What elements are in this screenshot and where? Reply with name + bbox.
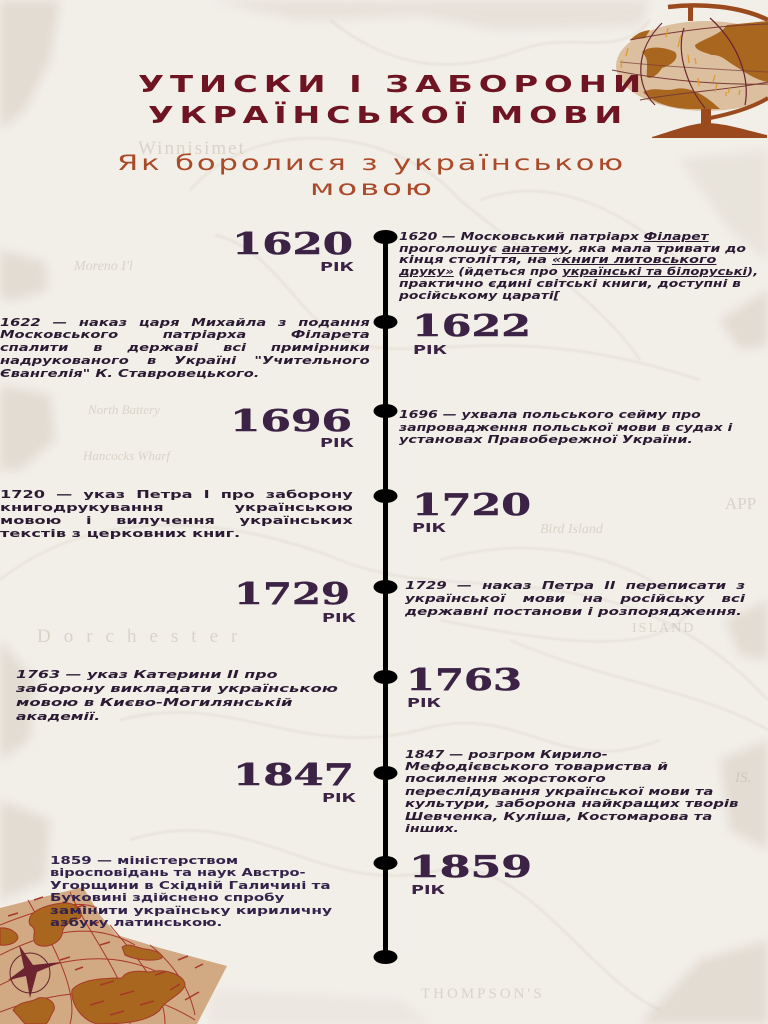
text block: 1622: Євангелія" К. Ставровецького. [0,367,259,380]
text block: 1847: 1847 — розгром Кирило- [405,748,608,760]
text block: 1622: спалити в державі всі примірники [0,341,370,354]
background map texture: THOMPSON'S [421,986,545,1002]
year: 1696: РІК [320,435,355,450]
text block: 1859: азбуку латинською. [50,916,222,929]
text block: 1847: посилення жорстокого [405,772,606,785]
text block: 1620: проголошує анатему, яка мала тривати до [399,242,746,255]
text block: 1847: переслідування української мови та [405,785,713,798]
year: 1729: РІК [322,610,357,625]
text block: 1720: 1720 — указ Петра І про заборону [0,488,353,500]
background map texture: IS. [734,770,751,786]
text block: 1622: надрукованого в Україні "Учительного [0,354,370,367]
text block: 1847 [405,748,738,835]
background map texture: ISLAND [632,621,695,636]
year: 1696 [230,404,355,450]
year: 1620 [232,227,355,274]
year: 1859: РІК [411,882,446,897]
text block: 1622: Московського патріарха Філарета [0,328,370,341]
text block: 1696: 1696 — ухвала польського сейму про [399,408,701,421]
text block: 1729: 1729 — наказ Петра II переписати з [405,578,745,592]
background map texture: Hancocks Wharf [82,448,172,463]
icon: compass rose [8,945,61,998]
year: 1622: 1622 [412,309,531,344]
text block: 1729: державні постанови і розпорядження. [405,604,742,618]
text block: 1763: мовою в Києво-Могилянській [16,696,292,709]
year: 1859: 1859 [409,850,532,885]
year: 1847: РІК [322,790,357,805]
text block: 1763: академії. [16,710,100,723]
year: 1729: 1729 [234,577,350,612]
text block: 1859: 1859 — міністерством [50,854,238,867]
text block: 1729 [404,578,746,618]
text block: 1720: мовою і вилучення українських [0,514,353,527]
year: 1847: 1847 [233,758,354,793]
text block: 1620 [398,230,758,302]
year: 1763 [406,663,522,710]
text block: 1622: 1622 — наказ царя Михайла з подання [0,316,370,328]
title: УКРАЇНСЬКОЇ МОВИ [148,101,628,129]
text block: 1859: Угорщини в Східній Галичині та [50,879,331,892]
background map texture: Winnisimet [138,138,246,159]
year: 1720: 1720 [412,488,531,523]
year: 1847 [233,758,357,805]
text block: 1763 [16,668,338,723]
year: 1720 [412,488,531,535]
text block: 1763: заборону викладати українською [16,682,338,695]
text block: 1720: книгодрукування українською [0,501,353,514]
text block: 1859: Буковині здійснено спробу [50,891,284,904]
text block: 1859 [50,854,332,929]
text block: 1859: віросповідань та наук Австро- [50,866,306,879]
text block: 1696: установах Правобережної України. [399,433,693,446]
year: 1696: 1696 [230,404,352,439]
year: 1622: РІК [413,342,448,357]
text block: 1620: практично єдині світські книги, доступні в [399,277,741,290]
subtitle [117,151,626,200]
text block: 1620: друку» (йдеться про українські та білоруські), [399,265,758,278]
subtitle: мовою [310,176,435,200]
title [138,72,647,129]
text block: 1847: Шевченка, Куліша, Костомарова та [405,810,712,823]
year: 1620: 1620 [232,227,353,262]
background map texture: North Battery [87,402,160,417]
text block: 1847: інших. [405,822,459,835]
year: 1720: РІК [412,520,447,535]
year: 1620: РІК [320,259,355,274]
year: 1763: 1763 [406,663,522,698]
text block: 1696 [399,408,732,446]
title: УТИСКИ І ЗАБОРОНИ [138,72,647,98]
year: 1763: РІК [407,695,442,710]
background map texture: Bird Island [540,522,604,537]
text block: 1620: російському цараті[ [399,289,560,302]
background map texture: Moreno I'l [73,259,133,274]
background map texture: APP [725,494,756,513]
text block: 1720: текстів з церковних книг. [0,527,240,540]
text block: 1847: Мефодієвського товариства й [405,760,668,773]
text block: 1620: кінця століття, на «книги литовського [399,253,716,266]
text block: 1763: 1763 — указ Катерини II про [16,668,277,681]
year: 1729 [234,577,357,625]
subtitle: Як боролися з українською [117,151,626,175]
text block: 1847: культури, заборона найкращих творів [405,797,738,810]
text block: 1622 [0,316,370,380]
text block: 1720 [0,488,353,540]
text block: 1859: замінити українську кириличну [50,904,332,917]
text block: 1620: 1620 — Московський патріарх Філарет [399,230,709,243]
year: 1622 [412,309,531,357]
text block: 1729: української мови на російську всі [405,592,745,604]
background map texture: Dorchester [37,626,250,647]
year: 1859 [409,850,532,897]
text block: 1696: запровадження польської мови в судах і [399,420,732,434]
